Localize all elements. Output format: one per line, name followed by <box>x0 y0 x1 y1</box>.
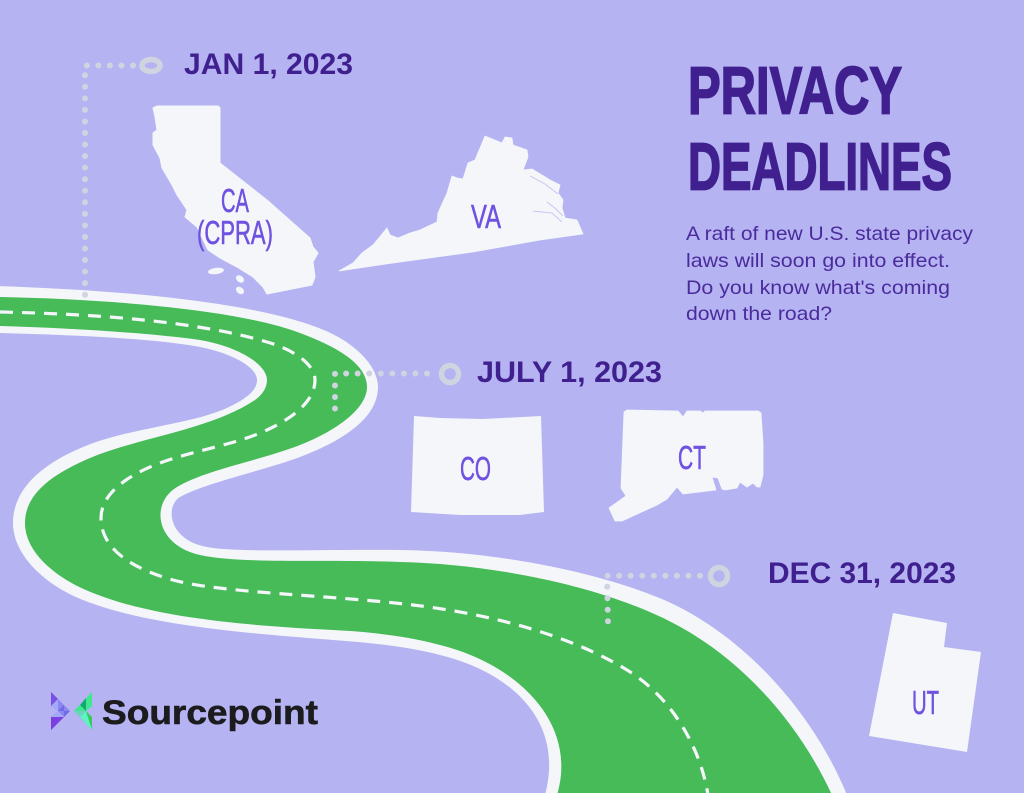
label CO: CO <box>460 450 491 487</box>
label VA: VA <box>471 198 501 235</box>
intro text: A raft of new U.S. state privacy <box>686 223 973 245</box>
intro text: down the road? <box>686 303 832 325</box>
intro text <box>686 223 973 325</box>
island <box>234 285 246 296</box>
ring marker <box>142 60 160 72</box>
island <box>208 267 224 275</box>
logo wordmark: Sourcepoint <box>102 694 318 732</box>
road surface <box>0 297 832 793</box>
logo mark: purple chevron <box>51 692 70 730</box>
marker: Dec 31 2023 <box>607 568 728 623</box>
state: California <box>153 106 318 296</box>
date: July 1 2023: JULY 1, 2023 <box>477 356 662 389</box>
California outline <box>153 106 318 294</box>
title line 1: PRIVACY <box>688 54 902 128</box>
Colorado outline <box>411 416 544 515</box>
Connecticut outline <box>609 410 763 521</box>
ring marker <box>710 568 728 584</box>
label CT: CT <box>678 439 706 476</box>
Utah outline <box>869 613 981 752</box>
label UT: UT <box>912 684 939 721</box>
state: Connecticut <box>609 410 763 521</box>
marker: July 1 2023 <box>335 366 458 410</box>
intro text: laws will soon go into effect. <box>686 250 950 272</box>
ring marker <box>442 366 458 382</box>
logo mark: green chevron <box>74 692 92 730</box>
rivers <box>530 176 563 222</box>
road centre dashed line <box>0 312 708 793</box>
date: Jan 1 2023: JAN 1, 2023 <box>184 48 353 81</box>
state: Colorado <box>411 416 544 515</box>
state: Utah <box>869 613 981 752</box>
dotted leader <box>335 374 427 410</box>
road shoulder <box>0 286 847 793</box>
winding road <box>0 286 847 793</box>
title <box>688 54 952 204</box>
label CA: CA <box>221 182 249 219</box>
Virginia outline <box>339 136 583 271</box>
island <box>234 274 246 284</box>
Sourcepoint logo <box>51 692 318 732</box>
marker: Jan 1 2023 <box>85 60 160 296</box>
label CPRA: (CPRA) <box>197 214 273 251</box>
dotted leader <box>607 576 700 623</box>
date: Dec 31 2023: DEC 31, 2023 <box>768 557 956 590</box>
dotted leader <box>85 66 133 296</box>
intro text: Do you know what's coming <box>686 277 950 299</box>
state: Virginia <box>339 136 583 271</box>
